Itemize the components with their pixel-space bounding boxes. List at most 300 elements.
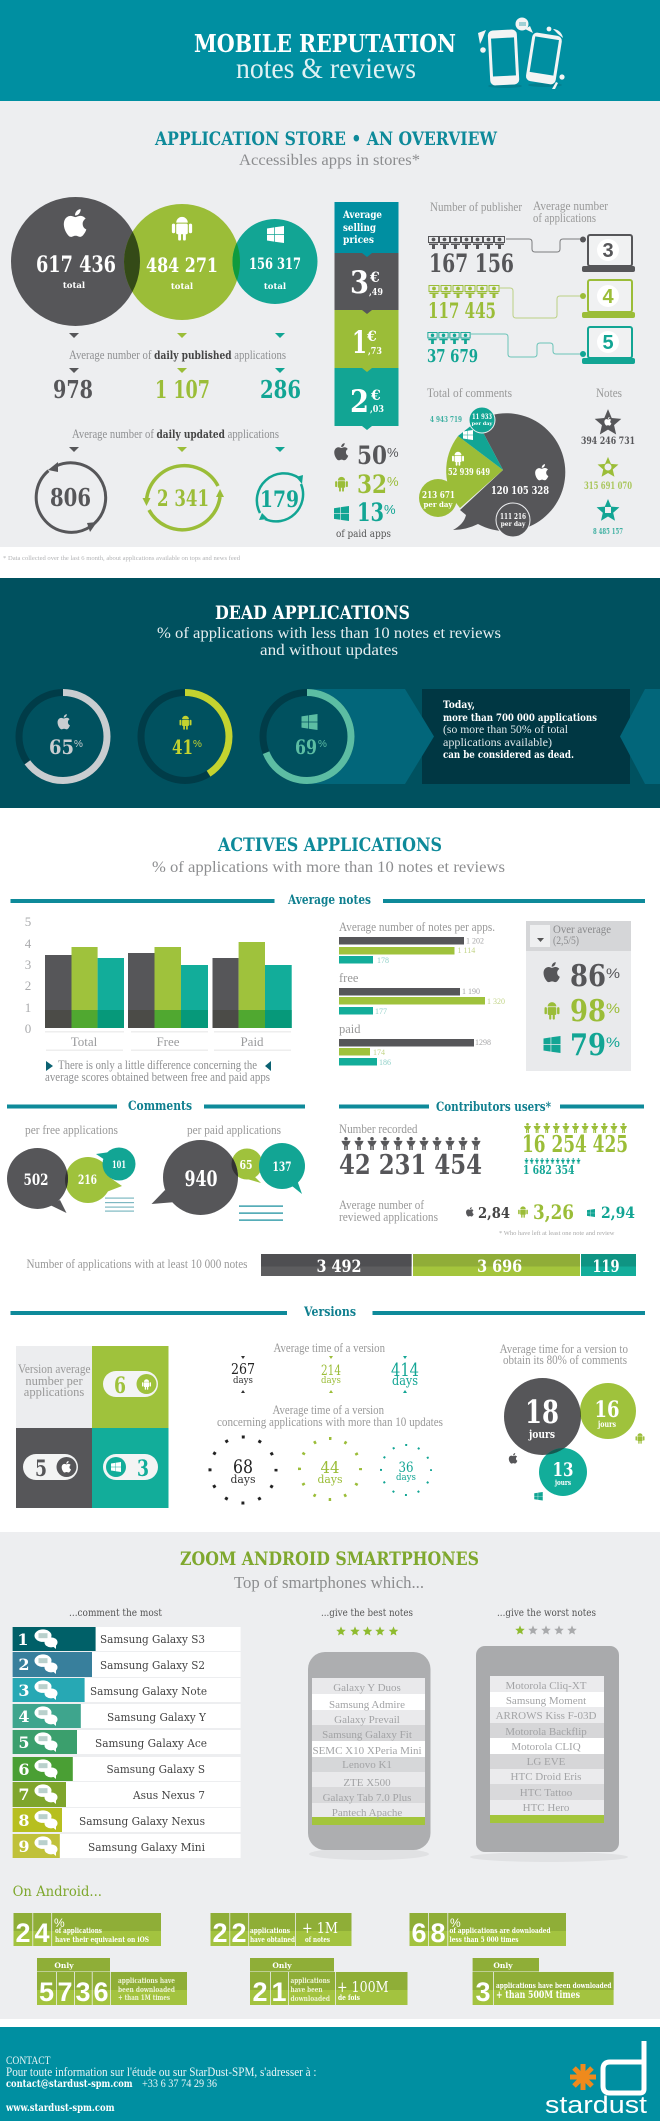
- horizontal bars: notes per app: paid: [339, 1022, 361, 1036]
- contributors: 1 682 354: [523, 1163, 574, 1177]
- y axis: 4: [25, 936, 32, 951]
- reviewed applications: 2,84: [478, 1204, 510, 1222]
- row: android publishers: 117 445: [428, 298, 496, 323]
- notes stars: 394 246 731: [581, 435, 635, 447]
- bubbles: comments per free applications: [7, 1123, 136, 1213]
- list: best notes phones: Pantech Apache: [332, 1807, 402, 1819]
- pie speech bubble: total of comments: [419, 385, 565, 537]
- stat box: 24%: %: [54, 1916, 65, 1930]
- panel: over average: (2,5/5): [553, 933, 579, 947]
- group free: [128, 947, 208, 1028]
- horizontal bars: notes per app: 174: [373, 1048, 385, 1057]
- reviewed applications: 2,94: [601, 1203, 635, 1222]
- row 1: Samsung Galaxy S3: [100, 1633, 205, 1646]
- horizontal bars: notes per app: 1 202: [466, 936, 484, 946]
- horizontal bars: notes per app: Average number of notes per apps.: [339, 920, 495, 934]
- daily published: 286: [260, 375, 301, 404]
- list: worst notes phones: Motorola Backflip: [505, 1726, 587, 1738]
- callout: more than 700 000 applications: [443, 713, 597, 724]
- stat box: only 5736: 5: [39, 1977, 54, 2007]
- publishers and applications: Average number: [533, 198, 609, 213]
- footnote: * Data collected over the last 6 month, about applications available on tops and news feed: [3, 555, 240, 562]
- ring: 806: 806: [50, 483, 91, 512]
- price: android: ,73: [368, 346, 382, 357]
- contact text: CONTACT: [6, 2053, 51, 2067]
- stat: 214 days: days: [321, 1375, 341, 1386]
- stat box: only 21: applications: [290, 1976, 330, 1985]
- row 9: 9: [18, 1837, 30, 1856]
- row 3: [13, 1678, 241, 1702]
- contact text: contact@stardust-spm.com: [6, 2078, 133, 2090]
- reviewed applications: [339, 1198, 635, 1224]
- stacked bar: apps with at least 10000 notes: 3 492: [316, 1257, 362, 1277]
- column heading: prices: [343, 234, 374, 246]
- paid apps share: %: [387, 474, 399, 489]
- y axis: 5: [25, 914, 31, 929]
- ring: windows 69%: 69: [295, 735, 317, 759]
- stat box: 24%: have their equivalent on iOS: [55, 1935, 149, 1944]
- pill: windows 3: 3: [137, 1456, 149, 1482]
- y axis: [25, 914, 32, 1036]
- stat box: only 3: Only: [493, 1961, 513, 1970]
- heading: APPLICATION STORE • AN OVERVIEW: [154, 129, 497, 150]
- stat box: only 21: + 100M: [337, 1978, 388, 1996]
- average time for 80% of comments: 16: [594, 1397, 620, 1423]
- ring: android 41%: %: [193, 739, 202, 750]
- contributors: [339, 1122, 635, 1237]
- stat box: 68%: of applications are downloaded: [450, 1926, 551, 1935]
- panel: over average: Over average: [553, 922, 611, 936]
- stat: 414 days: 414: [391, 1360, 419, 1381]
- ranking list: [13, 1627, 241, 1858]
- phone: worst notes: [470, 1646, 628, 1862]
- list: worst notes phones: Motorola CLIQ: [511, 1741, 581, 1753]
- callout: can be considered as dead.: [443, 750, 574, 761]
- stat: 214 days: 214: [321, 1363, 341, 1379]
- stat: 267 days: [231, 1356, 255, 1393]
- average time of a version: [210, 1341, 443, 1503]
- icon: windows: [267, 226, 284, 243]
- contributors: Number recorded: [339, 1122, 418, 1136]
- callout: [422, 689, 660, 784]
- ring: 806: [36, 462, 106, 532]
- column heading: [342, 209, 382, 246]
- row 3: Samsung Galaxy Note: [90, 1685, 207, 1698]
- price: apple: ,49: [369, 287, 383, 298]
- dial: 36 days: days: [396, 1472, 416, 1483]
- stat: android 98%: [544, 994, 620, 1029]
- apple total: 617 436: [36, 252, 116, 278]
- bubble: android per day: per day: [424, 500, 453, 509]
- stat: apple 86%: 86: [570, 959, 606, 994]
- paid apps share: %: [384, 502, 396, 517]
- dial: 68 days: [210, 1437, 276, 1503]
- bubble: windows per day: 11 933: [472, 412, 492, 421]
- notes stars: 315 691 070: [584, 481, 632, 492]
- stacked bar: apps with at least 10000 notes: 119: [592, 1257, 620, 1277]
- android total: 484 271: [146, 253, 218, 277]
- reviewed applications: 3,26: [533, 1200, 574, 1224]
- bubble: android per day: [419, 479, 465, 517]
- row 5: Samsung Galaxy Ace: [95, 1737, 207, 1750]
- callout: (so more than 50% of total: [443, 724, 568, 736]
- stat box: only 5736: been downloaded: [118, 1985, 176, 1994]
- stat box: only 21: de fois: [338, 1993, 360, 2002]
- divider heading: average notes: Average notes: [287, 893, 371, 908]
- stacked bar: apps with at least 10000 notes: [26, 1254, 636, 1277]
- stat box: only 5736: 6: [93, 1977, 109, 2007]
- chart note: average scores obtained between free and paid apps: [45, 1070, 270, 1084]
- price: apple: €: [369, 270, 380, 286]
- stat box: only 5736: 7: [57, 1977, 73, 2007]
- divider heading: comments: [7, 1099, 305, 1114]
- stat box: only 21: have been: [290, 1985, 323, 1994]
- horizontal bars: notes per app: [339, 920, 505, 1067]
- group paid: [212, 942, 292, 1028]
- stat box: 24%: [14, 1913, 161, 1948]
- row 6: [13, 1757, 241, 1781]
- row 6: Samsung Galaxy S: [106, 1763, 205, 1776]
- stars: worst notes: [515, 1625, 577, 1634]
- panel: version average number per applications: [16, 1346, 168, 1508]
- row: windows publishers: 5: [602, 332, 614, 354]
- paid apps share: 32: [357, 470, 387, 499]
- sub heading: Top of smartphones which...: [234, 1573, 424, 1592]
- bubbles: comments per paid applications: 137: [272, 1160, 292, 1175]
- list: best notes phones: ZTE X500: [343, 1777, 391, 1789]
- divider heading: versions: [10, 1305, 645, 1320]
- row: apple publishers: 167 156: [429, 249, 514, 278]
- stat box: only 5736: 3: [75, 1977, 91, 2007]
- stat box: only 5736: [37, 1958, 187, 2007]
- android comments: 52 939 649: [448, 467, 490, 478]
- price: android: 1: [352, 325, 367, 361]
- row 8: [13, 1808, 241, 1832]
- price: apple: 3: [350, 265, 369, 301]
- stat: windows 79%: 79: [570, 1028, 606, 1063]
- stat box: 22 applications: of notes: [305, 1935, 330, 1944]
- panel: over average: [526, 921, 631, 1071]
- horizontal bars: notes per app: 186: [379, 1058, 391, 1067]
- contact text: [5, 2053, 317, 2114]
- arrow band: [307, 689, 434, 784]
- total labels: total: [264, 282, 287, 292]
- icon row: teal people: [524, 1158, 581, 1164]
- average time for 80% of comments: 18: [525, 1393, 559, 1431]
- x labels: [71, 1034, 264, 1049]
- bar chart: average notes: [25, 914, 292, 1084]
- row 4: Samsung Galaxy Y: [107, 1711, 207, 1724]
- price: windows: 2: [350, 384, 369, 420]
- stars: best notes: [336, 1626, 398, 1635]
- divider heading: average notes: [10, 893, 645, 908]
- total labels: total: [63, 281, 86, 291]
- ring: apple 65%: [19, 692, 107, 780]
- divider heading: versions: Versions: [303, 1305, 356, 1320]
- stat: 414 days: [391, 1356, 419, 1393]
- list: best notes phones: [312, 1682, 422, 1819]
- daily published: 1 107: [155, 375, 210, 404]
- pie speech bubble: total of comments: Total of comments: [427, 385, 512, 400]
- pill: windows 3: [103, 1454, 158, 1482]
- callout: applications available): [443, 737, 552, 749]
- price: windows: [350, 384, 384, 420]
- total labels: total: [171, 282, 194, 292]
- average time of a version: Average time of a version: [272, 1403, 385, 1417]
- stat: 267 days: 267: [231, 1360, 255, 1378]
- icon: apple: [64, 209, 86, 237]
- average time of a version: concerning applications with more than 10 updates: [217, 1415, 443, 1429]
- bubbles: comments per free applications: per free applications: [25, 1123, 118, 1137]
- stat box: only 21: 1: [271, 1977, 287, 2007]
- bubble: windows per day: per day: [472, 421, 493, 427]
- bubble: apple per day: [495, 503, 530, 537]
- average time for 80% of comments: jours: [597, 1419, 616, 1429]
- apple comments: 120 105 328: [491, 484, 549, 497]
- list: worst notes phones: HTC Droid Eris: [511, 1771, 581, 1783]
- pill: apple 5: [23, 1454, 78, 1482]
- reviewed applications: reviewed applications: [339, 1210, 438, 1224]
- dial: 44 days: [300, 1438, 360, 1500]
- horizontal bars: notes per app: free: [339, 971, 359, 985]
- stat box: 68%: [410, 1913, 566, 1948]
- row 7: Asus Nexus 7: [132, 1789, 205, 1802]
- row: android publishers: 4: [602, 286, 614, 308]
- stat box: only 3: applications have been downloaded: [496, 1981, 612, 1990]
- venn circles: total apps per store: [11, 197, 318, 326]
- bubble: windows per day: [469, 407, 495, 433]
- ring: windows 69%: %: [318, 739, 327, 750]
- pill: apple 5: 5: [35, 1456, 47, 1482]
- phone: best notes: [308, 1652, 430, 1860]
- row 4: 4: [18, 1707, 30, 1726]
- stat box: only 3: 3: [475, 1977, 491, 2007]
- row 2: [13, 1652, 241, 1677]
- dial: 44 days: days: [318, 1472, 343, 1486]
- stat box: only 21: 2: [252, 1977, 268, 2007]
- sub heading: % of applications with less than 10 notes et reviews: [157, 625, 501, 642]
- column labels: [69, 1607, 596, 1619]
- panel: version average number per applications: number per: [25, 1374, 83, 1388]
- icon: apple white: [535, 464, 548, 480]
- stacked bar: apps with at least 10000 notes: Number of applications with at least 10 000 notes: [26, 1257, 248, 1271]
- column heading: selling: [343, 222, 377, 234]
- ring: apple 65%: 65: [49, 735, 74, 759]
- notes stars: [581, 385, 635, 536]
- row: windows publishers: 37 679: [427, 346, 478, 367]
- stat box: only 5736: applications have: [118, 1976, 175, 1985]
- subtitle: notes & reviews: [236, 52, 416, 85]
- stat: 267 days: days: [233, 1375, 253, 1386]
- horizontal bars: notes per app: 1 320: [487, 997, 505, 1006]
- horizontal bars: notes per app: 1 190: [462, 987, 480, 996]
- stat box: 68%: %: [450, 1916, 461, 1930]
- sub heading: actives: % of applications with more than 10 notes et reviews: [152, 859, 505, 876]
- list: best notes phones: Samsung Admire: [329, 1699, 405, 1711]
- bubbles: comments per paid applications: per paid applications: [187, 1123, 281, 1137]
- icon: windows white: [463, 430, 473, 440]
- bubbles: comments per free applications: 502: [24, 1170, 48, 1189]
- contact text: +33 6 37 74 29 36: [142, 2076, 217, 2090]
- divider heading: contributors: [339, 1100, 644, 1115]
- x labels: Paid: [240, 1034, 264, 1049]
- column labels: ...comment the most: [69, 1607, 163, 1619]
- publishers and applications: Number of publisher: [430, 199, 523, 214]
- bubble: android per day: 213 671: [422, 490, 455, 501]
- total labels: [63, 281, 287, 292]
- stacked bar: apps with at least 10000 notes: 3 696: [477, 1257, 522, 1277]
- daily updated: [36, 426, 303, 532]
- row 5: [13, 1730, 241, 1754]
- section: application store overview: [0, 101, 660, 547]
- bubbles: comments per free applications: 101: [112, 1160, 126, 1171]
- divider heading: contributors: Contributors users*: [436, 1100, 551, 1115]
- icon: android: [172, 217, 192, 241]
- icon: two phones: [478, 18, 565, 89]
- row 2: Samsung Galaxy S2: [100, 1659, 205, 1672]
- row 1: [13, 1627, 241, 1651]
- average time for 80% of comments: obtain its 80% of comments: [503, 1353, 627, 1367]
- stat: apple 86%: %: [606, 965, 620, 981]
- reviewed applications: Average number of: [339, 1198, 425, 1212]
- stat box: 22 applications: [210, 1913, 352, 1948]
- stat: android 98%: 98: [570, 994, 606, 1029]
- average time for 80% of comments: jours: [528, 1428, 555, 1441]
- y axis: 2: [25, 978, 31, 993]
- list: worst notes phones: Samsung Moment: [506, 1695, 586, 1707]
- daily published: [53, 333, 301, 404]
- stat box: 24%: 2: [15, 1918, 31, 1948]
- average time for 80% of comments: 13: [552, 1459, 574, 1481]
- header band: [0, 0, 660, 101]
- stat: apple 86%: [544, 959, 620, 994]
- row 8: 8: [18, 1811, 30, 1830]
- bubble: apple per day: 111 216: [500, 511, 526, 521]
- row: apple publishers: [428, 235, 635, 278]
- chart note: [45, 1058, 271, 1084]
- column labels: ...give the best notes: [321, 1607, 413, 1619]
- row 8: Samsung Galaxy Nexus: [79, 1815, 205, 1828]
- list: best notes phones: Galaxy Y Duos: [333, 1682, 401, 1694]
- contributors: 42 231 454: [339, 1150, 482, 1181]
- price: apple: [350, 265, 383, 301]
- label: windows comments: 4 943 719: [430, 415, 462, 425]
- stat box: 24%: 4: [34, 1918, 50, 1948]
- paid apps share: of paid apps: [336, 529, 391, 540]
- ring: 179: [257, 473, 303, 521]
- column heading: Average: [342, 209, 382, 221]
- stat box: 22 applications: applications: [250, 1926, 290, 1935]
- footer: [0, 2027, 660, 2121]
- daily published: Average number of daily published applications: [69, 347, 286, 362]
- dial: 68 days: 68: [233, 1456, 253, 1478]
- list: best notes phones: SEMC X10 XPeria Mini: [312, 1745, 422, 1757]
- paid apps share: [334, 441, 399, 540]
- stat box: only 21: downloaded: [290, 1994, 331, 2003]
- bubble: apple per day: per day: [501, 521, 526, 528]
- bubbles: comments per paid applications: 65: [240, 1158, 252, 1172]
- sub heading: Accessibles apps in stores*: [239, 152, 420, 169]
- notes stars: 8 485 157: [593, 526, 623, 536]
- stat box: 22 applications: 2: [212, 1918, 228, 1948]
- stat box: only 3: [473, 1958, 614, 2007]
- x labels: Total: [71, 1034, 98, 1049]
- row 7: [13, 1782, 241, 1807]
- row 2: 2: [18, 1655, 30, 1674]
- average selling prices column: [334, 202, 398, 430]
- column labels: ...give the worst notes: [497, 1607, 596, 1619]
- price: windows: €: [370, 388, 381, 404]
- y axis: 1: [25, 1000, 31, 1015]
- horizontal bars: notes per app: 177: [375, 1007, 387, 1016]
- sub heading: [157, 625, 501, 659]
- stat box: only 5736: Only: [54, 1961, 74, 1970]
- notes stars: Notes: [596, 385, 622, 400]
- sub heading: and without updates: [260, 642, 398, 659]
- row: windows publishers: [427, 327, 635, 367]
- pill: android 6: [103, 1371, 158, 1399]
- list: worst notes phones: ARROWS Kiss F-03D: [496, 1710, 596, 1722]
- price: windows: ,03: [370, 404, 384, 415]
- row 9: [13, 1834, 241, 1858]
- horizontal bars: notes per app: 178: [377, 956, 389, 965]
- row: apple publishers: 3: [602, 240, 614, 262]
- y axis: 0: [25, 1021, 31, 1036]
- stat: 214 days: [321, 1356, 341, 1393]
- stat box: 22 applications: + 1M: [302, 1919, 338, 1937]
- dial: 36 days: [381, 1445, 431, 1495]
- paid apps share: %: [387, 445, 399, 460]
- x labels: Free: [156, 1034, 180, 1049]
- callout: Today,: [443, 700, 475, 711]
- ring: 2341: 2 341: [157, 486, 209, 512]
- heading: on android: On Android...: [13, 1884, 102, 1900]
- panel: version average number per applications: applications: [24, 1385, 84, 1399]
- stat box: 68%: less than 5 000 times: [450, 1935, 519, 1944]
- list: worst notes phones: LG EVE: [527, 1756, 566, 1768]
- row 4: [13, 1704, 241, 1728]
- list: best notes phones: Lenovo K1: [342, 1759, 392, 1771]
- stat: android 98%: %: [606, 1000, 620, 1016]
- list: best notes phones: Galaxy Tab 7.0 Plus: [323, 1792, 411, 1804]
- y axis: 3: [25, 957, 31, 972]
- list: best notes phones: Galaxy Prevail: [334, 1714, 400, 1726]
- stat: 414 days: days: [392, 1374, 418, 1389]
- icon row: dark people: [341, 1137, 481, 1150]
- row 7: 7: [18, 1785, 30, 1804]
- bubbles: comments per paid applications: 940: [184, 1166, 218, 1191]
- row 6: 6: [18, 1760, 30, 1779]
- row 5: 5: [18, 1733, 30, 1752]
- price: android: €: [366, 329, 377, 345]
- stat box: 24%: of applications: [55, 1926, 102, 1935]
- average time for 80% of comments: [500, 1342, 644, 1500]
- daily updated: Average number of daily updated applications: [72, 426, 279, 441]
- list: worst notes phones: [496, 1680, 596, 1814]
- stardust logo: [545, 2041, 647, 2119]
- stat box: only 5736: + than 1M times: [118, 1993, 170, 2002]
- stat box: 68%: 8: [430, 1918, 446, 1948]
- heading: DEAD APPLICATIONS: [215, 602, 410, 624]
- stat box: 22 applications: 2: [231, 1918, 247, 1948]
- stat box: 68%: 6: [411, 1918, 427, 1948]
- dial: 36 days: 36: [398, 1460, 414, 1476]
- list: worst notes phones: HTC Tattoo: [520, 1787, 573, 1799]
- ring: 179: 179: [260, 487, 299, 513]
- paid apps share: 13: [357, 498, 384, 527]
- ring: android 41%: 41: [172, 735, 193, 759]
- contact text: www.stardust-spm.com: [5, 2102, 115, 2114]
